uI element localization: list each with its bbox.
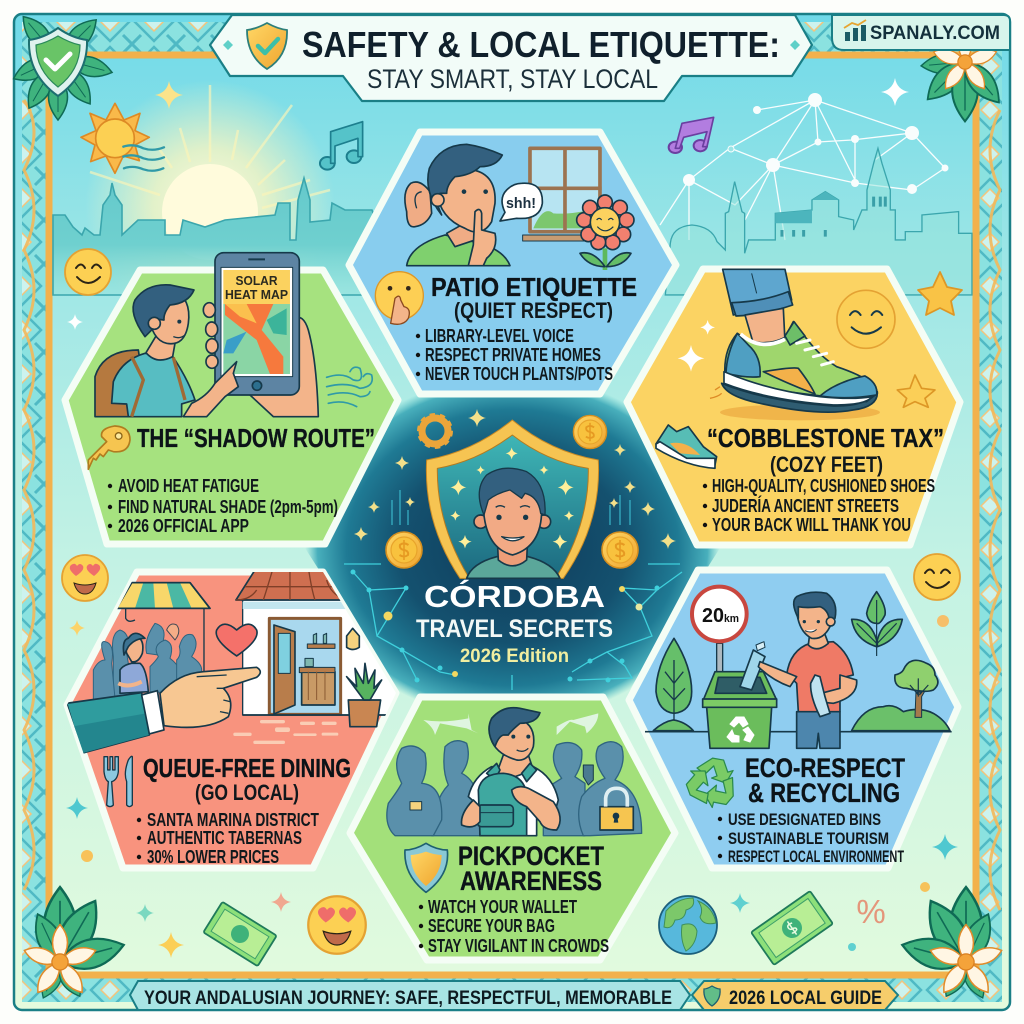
brand tag: [832, 15, 1010, 50]
bullets: queue-free: [137, 810, 319, 867]
icon: coin right: [602, 532, 638, 568]
icon: globe: [659, 896, 717, 954]
icon: sparkle top-right: [881, 78, 909, 106]
heading: awareness: AWARENESS: [460, 866, 602, 896]
bullets: eco: SUSTAINABLE TOURISM: [728, 829, 889, 848]
icon: shield: [405, 843, 448, 892]
bullets: shadow route: [108, 476, 338, 536]
heading: patio: PATIO ETIQUETTE: [431, 272, 637, 302]
bullets: cobblestone: HIGH-QUALITY, CUSHIONED SHOES: [712, 476, 935, 496]
shield with person: [426, 420, 599, 578]
illustration: pointing hand and local tavern: [67, 567, 409, 753]
icon: banknote left: [203, 902, 277, 966]
constellation network: [660, 93, 948, 240]
emoji: smile right: [914, 554, 960, 600]
footer guide badge: [692, 981, 898, 1010]
heading: eco-respect: ECO-RESPECT: [745, 753, 905, 783]
title banner: SAFETY & LOCAL ETIQUETTE:: [302, 24, 780, 65]
title banner: STAY SMART, STAY LOCAL: [367, 64, 658, 94]
icon: shushing emoji: [375, 272, 423, 324]
speed sign unit: km: [724, 613, 739, 625]
skyline right: [665, 148, 972, 295]
icon: small shoe: [656, 425, 717, 468]
illustration: man shushing with window and flower: [405, 144, 634, 270]
panel: patio etiquette: [349, 132, 676, 394]
phone map label: HEAT MAP: [225, 287, 288, 302]
panel: pickpocket awareness: [350, 697, 675, 960]
icon: recycling on bin: [727, 717, 754, 742]
bullets: shadow route: 2026 OFFICIAL APP: [118, 516, 249, 536]
emoji: smile upper left: [65, 249, 111, 295]
bullets: queue-free: AUTHENTIC TABERNAS: [147, 828, 302, 848]
icon: gear: [420, 416, 450, 446]
heading: recycling: & RECYCLING: [748, 778, 900, 808]
footer band: [130, 981, 690, 1010]
bullets: queue-free: SANTA MARINA DISTRICT: [147, 810, 319, 830]
illustration: person recycling with bin, sign and trees: [645, 587, 952, 748]
illustration: traveller securing backpack in crowd: [387, 708, 642, 836]
corner: top-right flower: [920, 29, 1008, 121]
heading: pickpocket: PICKPOCKET: [458, 841, 604, 871]
panel: center Córdoba: [344, 409, 682, 690]
panel: shadow route: [65, 253, 398, 544]
sun glow and rays: [85, 80, 335, 330]
decorative sparkles: [66, 314, 958, 958]
icon: fork and knife: [104, 756, 132, 807]
bullets: patio: LIBRARY-LEVEL VOICE: [425, 326, 574, 346]
heading: cobblestone: “COBBLESTONE TAX”: [707, 423, 944, 453]
bullets: pickpocket: STAY VIGILANT IN CROWDS: [428, 936, 609, 956]
edition label: 2026 Edition: [460, 646, 569, 667]
bullets: patio: [416, 326, 613, 384]
bullets: queue-free: 30% LOWER PRICES: [147, 847, 279, 867]
bullets: eco: [718, 810, 904, 866]
icon: recycling arrows: [683, 756, 742, 813]
icon: purple music note: [669, 117, 714, 153]
speech bubble text: shh!: [506, 195, 536, 212]
illustration: traveller with phone: [95, 253, 372, 417]
subheading: patio: (QUIET RESPECT): [454, 298, 613, 323]
illustration: walking shoe: [678, 269, 935, 420]
brand tag: SPANALY.COM: [870, 23, 1000, 44]
bullets: pickpocket: WATCH YOUR WALLET: [428, 897, 577, 917]
heading: shadow route: THE “SHADOW ROUTE”: [137, 423, 375, 453]
icon: percent: %: [856, 893, 886, 930]
panel: cobblestone tax: [627, 269, 960, 545]
bullets: cobblestone: JUDERÍA ANCIENT STREETS: [712, 495, 899, 516]
bullets: shadow route: AVOID HEAT FATIGUE: [118, 476, 259, 496]
phone map label: SOLAR: [236, 273, 278, 288]
bullets: shadow route: FIND NATURAL SHADE (2pm-5pm): [118, 497, 338, 517]
sparkles and light trails: [354, 409, 676, 549]
heading: Córdoba: CÓRDOBA: [424, 578, 605, 614]
subheading: travel secrets: TRAVEL SECRETS: [416, 615, 613, 643]
subheading: queue-free: (GO LOCAL): [195, 780, 299, 805]
speed sign text: 20: [702, 605, 724, 627]
bullets: cobblestone: YOUR BACK WILL THANK YOU: [712, 515, 911, 535]
icon: banknote right: [751, 891, 833, 965]
icon: teal music note: [320, 122, 363, 170]
center panel dark hexagon: [305, 375, 720, 720]
icon: star right: [918, 272, 962, 315]
icon: coin left: [386, 532, 422, 568]
bullets: patio: NEVER TOUCH PLANTS/POTS: [425, 364, 613, 384]
phone map label: [225, 273, 288, 302]
bullets: patio: RESPECT PRIVATE HOMES: [425, 345, 601, 365]
bullets: eco: RESPECT LOCAL ENVIRONMENT: [728, 847, 904, 866]
icon: gold key: [88, 426, 130, 469]
corner: bottom-right flower: [899, 887, 1004, 1002]
icon: coin top right: [573, 415, 607, 449]
corner: bottom-left flower: [22, 887, 127, 1002]
heading: queue-free: QUEUE-FREE DINING: [143, 753, 351, 783]
corner: shield with leaves: [10, 11, 115, 120]
gold ribbon on side bands: [24, 100, 1000, 910]
bullets: eco: USE DESIGNATED BINS: [728, 810, 881, 829]
emoji: heart eyes left: [62, 555, 108, 601]
panel: eco-respect: [629, 570, 958, 868]
footer guide badge: 2026 LOCAL GUIDE: [729, 988, 882, 1009]
footer band: YOUR ANDALUSIAN JOURNEY: SAFE, RESPECTFUL, MEMORABLE: [144, 988, 672, 1009]
skyline left: [53, 178, 400, 295]
emoji: heart eyes bottom: [308, 896, 366, 954]
bullets: cobblestone: [703, 476, 935, 535]
bullets: pickpocket: [419, 897, 609, 956]
bullets: pickpocket: SECURE YOUR BAG: [428, 916, 555, 936]
icon: sparkle top-left: [155, 81, 183, 109]
title banner: [210, 15, 812, 101]
subheading: cobblestone: (COZY FEET): [770, 452, 883, 477]
panel: queue-free dining: [67, 567, 409, 868]
circuit network: [344, 564, 682, 690]
icon: title shield: [247, 23, 287, 69]
icon: sun with wind: [81, 103, 164, 173]
